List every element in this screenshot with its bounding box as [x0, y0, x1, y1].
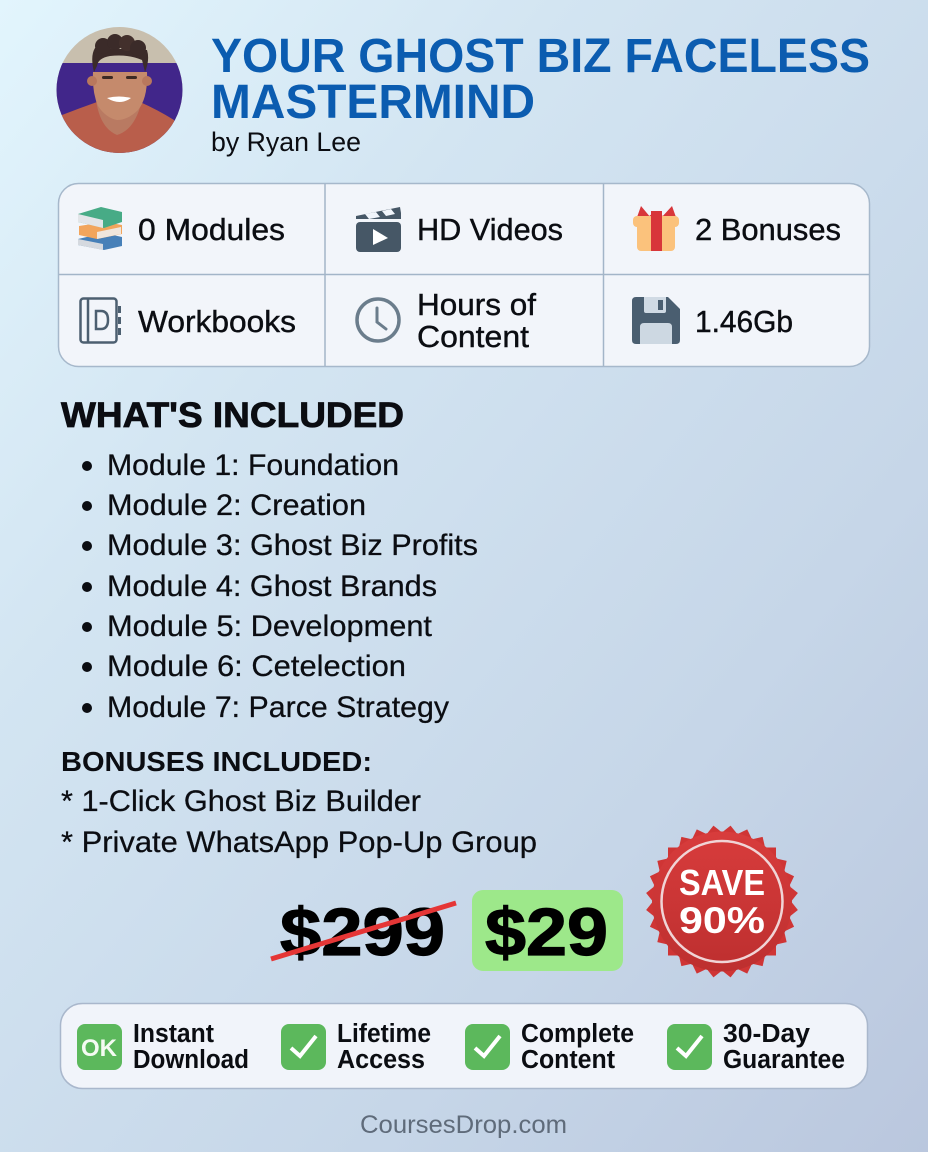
guarantee: 30-day guarantee: Guarantee: [723, 1046, 845, 1074]
icon: OK badge: [77, 1024, 122, 1070]
footer: source site: CoursesDrop.com: [360, 1111, 567, 1139]
guarantee: complete content: Content: [521, 1046, 615, 1074]
guarantee: instant download: [133, 1020, 249, 1074]
badge: save 90%: 90%: [679, 900, 765, 941]
module list: Module 6: Cetelection: [107, 650, 406, 683]
module list: Module 4: Ghost Brands: [107, 570, 437, 603]
author byline: by Ryan Lee: [211, 127, 361, 157]
icon: clock: [357, 299, 399, 341]
new price: [472, 890, 623, 971]
title: MASTERMIND: [211, 76, 535, 129]
panel: guarantees bar: [60, 1004, 868, 1088]
icon: author portrait: [56, 27, 183, 154]
icon: workbook: [80, 298, 120, 342]
bonus list: * Private WhatsApp Pop-Up Group: [61, 826, 537, 859]
stat: file size: 1.46Gb: [695, 305, 793, 339]
guarantee: complete content: [521, 1020, 634, 1074]
icon: OK badge: OK: [81, 1035, 118, 1062]
badge: save 90%: [646, 826, 798, 977]
old price struck through: $299: [280, 895, 445, 970]
guarantee: lifetime access: [337, 1020, 431, 1074]
module list: Module 7: Parce Strategy: [107, 691, 449, 724]
guarantee: lifetime access: Lifetime: [337, 1020, 431, 1048]
module list: [82, 449, 478, 724]
new price: $29: [485, 895, 608, 970]
title: [211, 30, 870, 129]
stat: bonuses: 2 Bonuses: [695, 213, 841, 247]
stat: hours of content: Content: [417, 320, 530, 354]
bonus list: * 1-Click Ghost Biz Builder: [61, 785, 421, 818]
icon: check mark: [667, 1024, 712, 1070]
stat: hours of content: [417, 288, 537, 354]
icon: floppy disk: [632, 297, 680, 344]
heading: bonuses included: BONUSES INCLUDED:: [61, 746, 372, 777]
icon: gift box: [633, 206, 679, 251]
module list: Module 3: Ghost Biz Profits: [107, 529, 478, 562]
icon: check mark: [281, 1024, 326, 1070]
bonus list: [61, 785, 537, 859]
title: YOUR GHOST BIZ FACELESS: [211, 30, 870, 83]
stat: hours of content: Hours of: [417, 288, 537, 322]
guarantee: lifetime access: Access: [337, 1046, 425, 1074]
guarantee: instant download: Download: [133, 1046, 249, 1074]
module list: Module 1: Foundation: [107, 449, 399, 482]
guarantee: 30-day guarantee: 30-Day: [723, 1020, 811, 1048]
stat: videos: HD Videos: [417, 213, 563, 247]
guarantee: instant download: Instant: [133, 1020, 214, 1048]
stat: workbooks: Workbooks: [138, 305, 296, 339]
panel: course stats grid: [58, 184, 870, 366]
module list: Module 5: Development: [107, 610, 432, 643]
icon: video clapperboard: [356, 207, 401, 252]
heading: what's included: WHAT'S INCLUDED: [61, 396, 404, 435]
icon: check mark: [465, 1024, 510, 1070]
icon: stack of books: [78, 207, 122, 250]
guarantee: 30-day guarantee: [723, 1020, 845, 1074]
guarantee: complete content: Complete: [521, 1020, 634, 1048]
badge: save 90%: SAVE: [679, 862, 765, 903]
stat: modules: 0 Modules: [138, 213, 285, 247]
module list: Module 2: Creation: [107, 489, 366, 522]
